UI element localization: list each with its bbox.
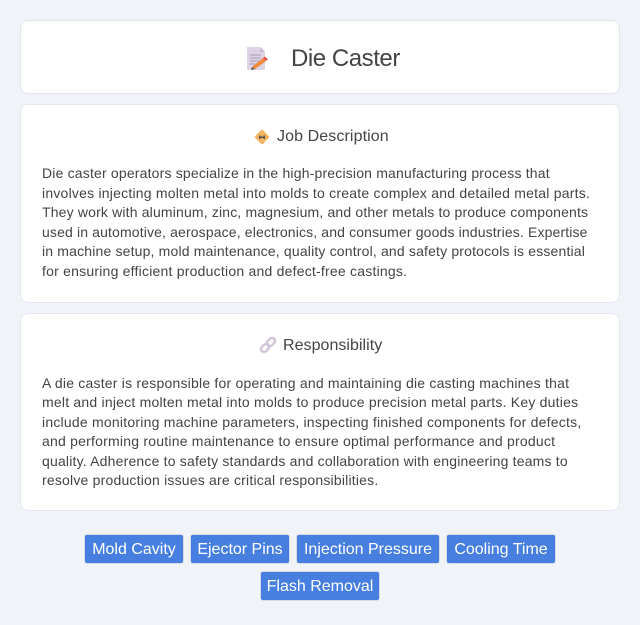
tag: ejector pins xyxy=(190,534,290,564)
icon: link xyxy=(260,336,276,354)
text block: job description: They work with aluminum, zinc, magnesium, and other metals to produce components xyxy=(42,204,588,220)
text block: job description: for ensuring efficient production and defect-free castings. xyxy=(42,263,407,279)
tag: cooling time: Cooling Time xyxy=(454,541,548,558)
tag: ejector pins: Ejector Pins xyxy=(197,541,283,558)
text block: responsibility: and performing routine maintenance to ensure optimal performance and product xyxy=(42,433,555,449)
text block: job description: used in automotive, aerospace, electronics, and consumer goods industries. Expertise xyxy=(42,224,588,240)
text block: job description: Die caster operators specialize in the high-precision manufacturing process that xyxy=(42,165,550,181)
title: Die Caster xyxy=(291,45,400,72)
icon: diamond sign xyxy=(254,130,270,144)
text block: responsibility: quality. Adherence to safety standards and collaboration with engineering teams to xyxy=(42,453,568,469)
tag: injection pressure xyxy=(296,534,440,564)
tag: mold cavity: Mold Cavity xyxy=(92,541,176,558)
tag: flash removal: Flash Removal xyxy=(267,578,373,595)
panel: responsibility xyxy=(20,313,620,511)
tag: flash removal xyxy=(260,571,380,601)
text block: responsibility: resolve production issues are critical responsibilities. xyxy=(42,472,378,488)
tag: cooling time xyxy=(446,534,556,564)
text block: responsibility: melt and inject molten metal into molds to produce precision metal parts. Key duties xyxy=(42,394,578,410)
panel: job description xyxy=(20,104,620,303)
text block: job description: in machine setup, mold maintenance, quality control, and safety protocols is essential xyxy=(42,243,585,259)
icon: document with pencil xyxy=(247,47,268,70)
text block: responsibility: A die caster is responsible for operating and maintaining die casting machines that xyxy=(42,375,569,391)
tags xyxy=(84,534,556,601)
panel: title card xyxy=(20,20,620,94)
tag: mold cavity xyxy=(84,534,184,564)
heading: job description: Job Description xyxy=(277,128,389,145)
text block: responsibility xyxy=(42,375,581,488)
text block: job description: involves injecting molten metal into molds to create complex and detailed metal parts. xyxy=(42,185,590,201)
text block: responsibility: include monitoring machine parameters, inspecting finished components for defects, xyxy=(42,414,581,430)
tag: injection pressure: Injection Pressure xyxy=(304,541,432,558)
text block: job description xyxy=(42,165,590,279)
heading: responsibility: Responsibility xyxy=(283,337,382,354)
